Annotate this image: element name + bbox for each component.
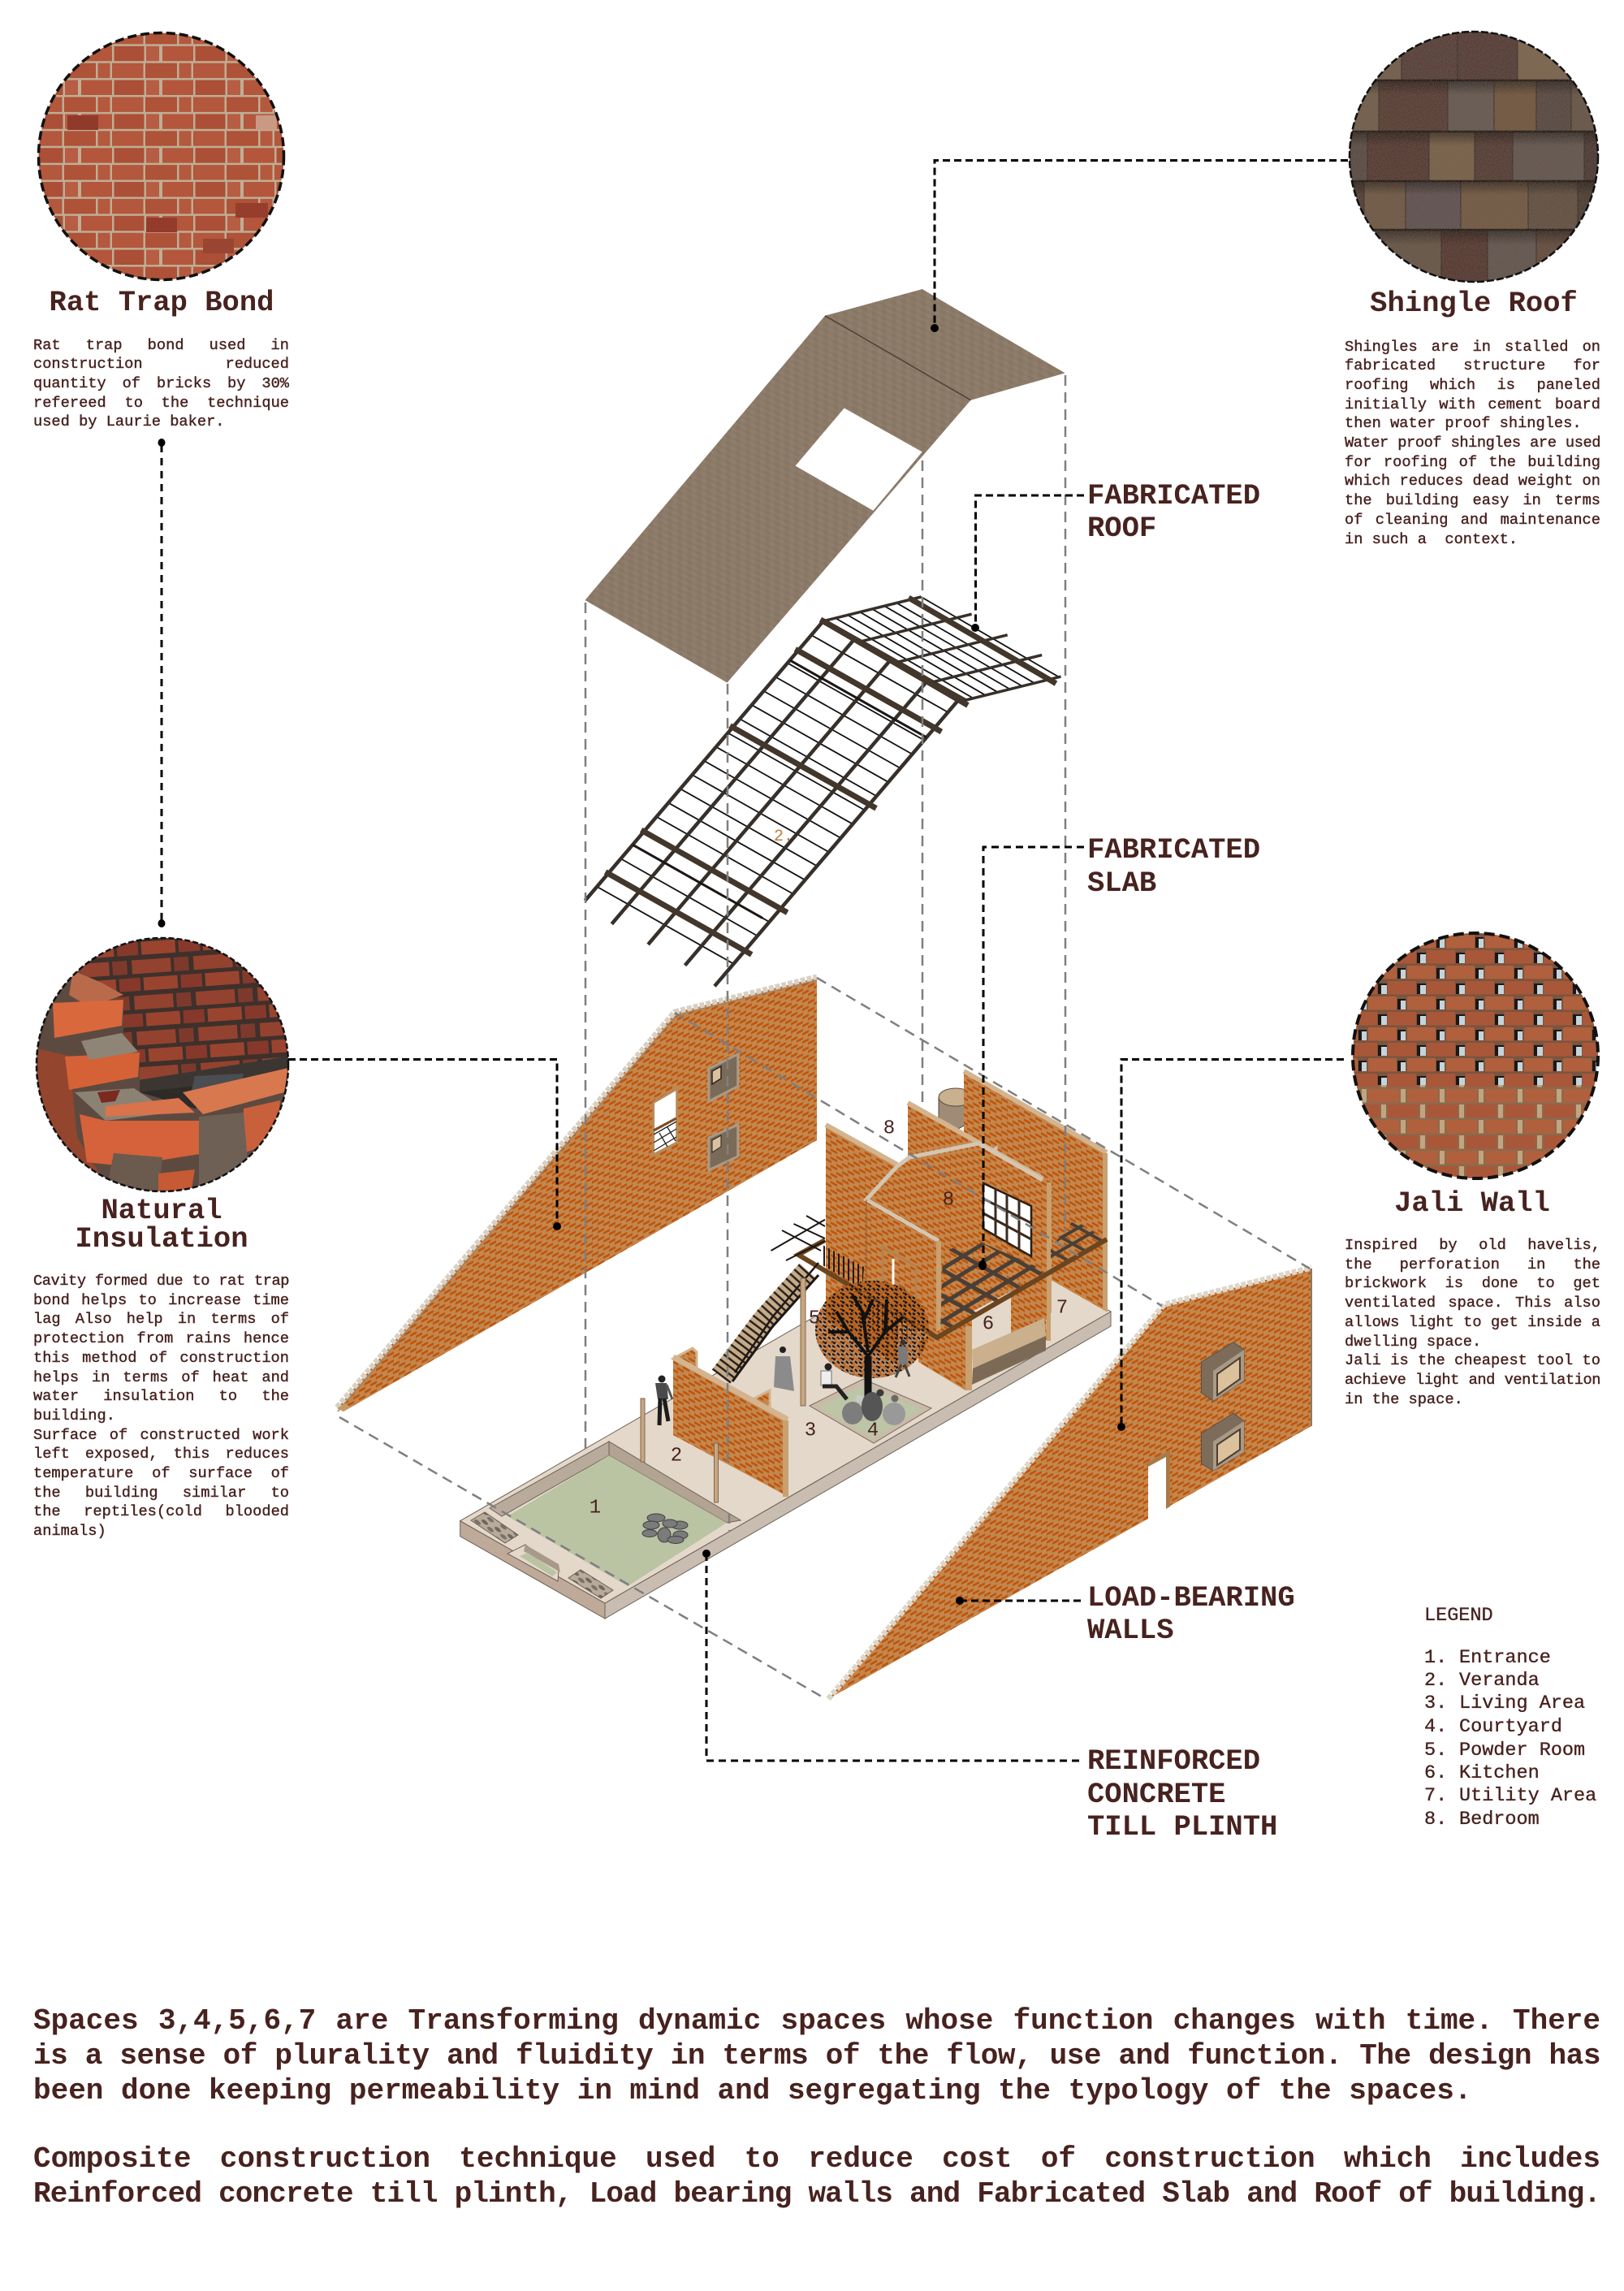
left upper wall xyxy=(826,1125,897,1364)
grey dashed projection lines xyxy=(339,375,1310,1699)
space numbers on plan: 8 xyxy=(883,1117,895,1140)
label: reinforced concrete till plinth xyxy=(1087,1744,1277,1844)
heading: Natural Insulation: Natural xyxy=(101,1194,222,1227)
leader: rat trap bond to natural insulation xyxy=(158,439,166,927)
text block: shingle roof xyxy=(1345,338,1600,548)
legend: Courtyard xyxy=(1459,1716,1562,1738)
planter left xyxy=(471,1512,518,1543)
label: fabricated roof: FABRICATED xyxy=(1087,479,1260,512)
text block: jali wall xyxy=(1345,1236,1600,1408)
legend: Living Area xyxy=(1459,1692,1585,1714)
text block: natural insulation xyxy=(33,1272,289,1540)
legend xyxy=(1424,1605,1596,1831)
space numbers on plan: 8 xyxy=(943,1189,954,1212)
text block: jali wall: allows light to get inside a xyxy=(1345,1313,1600,1331)
text block: natural insulation: the reptiles(cold blooded xyxy=(33,1502,289,1520)
space numbers on plan: 1 xyxy=(590,1498,601,1519)
person: woman in sari xyxy=(774,1347,794,1391)
courtyard with tree and people xyxy=(655,1281,931,1443)
text block: jali wall: brickwork is done to get xyxy=(1345,1274,1600,1292)
label: reinforced concrete till plinth: REINFORCED xyxy=(1087,1744,1260,1778)
text block: natural insulation: protection from rains hence xyxy=(33,1329,289,1347)
text block: shingle roof: Shingles are in stalled on xyxy=(1345,338,1600,356)
bedroom window xyxy=(983,1183,1031,1256)
legend: LEGEND xyxy=(1424,1605,1493,1627)
text block: shingle roof: Water proof shingles are used xyxy=(1345,434,1600,452)
gable wall xyxy=(866,1143,1052,1341)
entrance lawn xyxy=(490,1442,741,1592)
exploded layer: left load-bearing wall xyxy=(337,977,817,1411)
label: fabricated slab: FABRICATED xyxy=(1087,833,1260,867)
window box upper xyxy=(1202,1342,1244,1401)
wall recessed window lower xyxy=(709,1125,738,1170)
planter right xyxy=(568,1570,613,1598)
photo circle: shingle roof xyxy=(1340,29,1605,285)
exploded layer: fabricated roof frame xyxy=(575,592,1081,990)
label: fabricated slab: SLAB xyxy=(1087,867,1156,900)
text block: jali wall: Inspired by old havelis, xyxy=(1345,1236,1600,1254)
leader: load-bearing walls xyxy=(956,1597,1084,1605)
space numbers on plan: 4 xyxy=(867,1420,879,1442)
heading: Shingle Roof: Shingle Roof xyxy=(1370,287,1578,320)
text block: rat trap bond: used by Laurie baker. xyxy=(33,413,225,430)
text block: shingle roof: initially with cement board xyxy=(1345,396,1600,413)
label: load-bearing walls xyxy=(1087,1581,1295,1647)
text block: rat trap bond: construction reduced xyxy=(33,355,289,373)
text block: shingle roof: the building easy in terms xyxy=(1345,491,1600,509)
space numbers on plan: 6 xyxy=(983,1314,994,1335)
legend: Kitchen xyxy=(1459,1762,1540,1784)
photo circle: rat trap bond brickwork xyxy=(32,28,292,288)
legend: 1. xyxy=(1424,1647,1447,1669)
text block: shingle roof: of cleaning and maintenance xyxy=(1345,511,1600,529)
water tank xyxy=(939,1088,973,1129)
leader: fabricated slab xyxy=(978,847,1084,1270)
text block: jali wall: in the space. xyxy=(1345,1390,1463,1408)
text block: rat trap bond: refereed to the technique xyxy=(33,394,289,412)
text block: transforming spaces paragraph: is a sense of plurality and fluidity in terms of the flow, use and function. The design has xyxy=(33,2039,1600,2073)
legend: 6. xyxy=(1424,1762,1447,1784)
plinth slab xyxy=(460,1230,1111,1619)
tree xyxy=(815,1281,929,1398)
text block: natural insulation: animals) xyxy=(33,1522,106,1540)
legend: 5. xyxy=(1424,1740,1447,1761)
text block: shingle roof: roofing which is paneled xyxy=(1345,376,1600,394)
legend: Veranda xyxy=(1459,1670,1540,1692)
veranda brick wall xyxy=(673,1348,788,1497)
text block: natural insulation: lag Also help in terms of xyxy=(33,1310,289,1328)
legend: 2. xyxy=(1424,1670,1447,1692)
exploded layer: right load-bearing wall xyxy=(828,1268,1311,1699)
staircase xyxy=(721,1263,818,1381)
text block: natural insulation: Cavity formed due to rat trap xyxy=(33,1272,289,1290)
text block: natural insulation: bond helps to increase time xyxy=(33,1291,289,1309)
roof skylight opening xyxy=(796,408,922,511)
text block: transforming spaces paragraph: been done keeping permeability in mind and segregating the typology of the spaces. xyxy=(33,2074,1471,2107)
label: load-bearing walls: LOAD-BEARING xyxy=(1087,1581,1295,1615)
text block: rat trap bond: Rat trap bond used in xyxy=(33,336,289,354)
person: man walking xyxy=(655,1376,672,1425)
veranda and living posts xyxy=(641,1278,806,1502)
text block: rat trap bond xyxy=(33,336,289,430)
space numbers on plan: 7 xyxy=(1056,1298,1068,1319)
text block: natural insulation: left exposed, this reduces xyxy=(33,1445,289,1463)
legend: 8. xyxy=(1424,1809,1447,1831)
leader: fabricated roof xyxy=(971,495,1084,632)
heading: Natural Insulation xyxy=(75,1194,248,1256)
leader: reinforced concrete plinth xyxy=(702,1550,1084,1761)
text block: natural insulation: water insulation to the xyxy=(33,1387,289,1405)
text block: jali wall: Jali is the cheapest tool to xyxy=(1345,1351,1600,1369)
leader: jali wall xyxy=(1117,1059,1344,1431)
person: seated man xyxy=(821,1363,847,1399)
rear cross wall xyxy=(964,1071,1108,1312)
ground layer: plinth and entrance court xyxy=(460,1280,1112,1619)
space numbers on plan xyxy=(590,1117,1068,1519)
text block: rat trap bond: quantity of bricks by 30% xyxy=(33,374,289,392)
legend: 3. xyxy=(1424,1692,1447,1714)
text block: transforming spaces paragraph xyxy=(33,2004,1600,2107)
people: seated group xyxy=(842,1389,905,1425)
text block: composite construction paragraph: Composite construction technique used to reduce cost of construction which includes xyxy=(33,2142,1600,2176)
text block: shingle roof: for roofing of the building xyxy=(1345,453,1600,471)
stair railing xyxy=(823,1245,913,1344)
photo circle: natural insulation cavity wall xyxy=(32,934,292,1194)
text block: shingle roof: then water proof shingles. xyxy=(1345,414,1582,432)
text block: transforming spaces paragraph: Spaces 3,4,5,6,7 are Transforming dynamic spaces whose function changes with time. There xyxy=(33,2004,1600,2038)
wall recessed window upper xyxy=(709,1054,738,1101)
text block: natural insulation: building. xyxy=(33,1407,115,1424)
window box lower xyxy=(1202,1413,1244,1471)
space numbers on plan: 5 xyxy=(809,1308,820,1330)
text block: composite construction paragraph xyxy=(33,2142,1600,2211)
label: fabricated slab xyxy=(1087,833,1260,900)
text block: jali wall: ventilated space. This also xyxy=(1345,1294,1600,1312)
first floor slab lattice xyxy=(771,1215,1108,1340)
text block: jali wall: achieve light and ventilation xyxy=(1345,1371,1600,1389)
text block: jali wall: the perforation in the xyxy=(1345,1256,1600,1273)
wall opening with view through xyxy=(654,1089,677,1155)
legend: Utility Area xyxy=(1459,1785,1596,1807)
text block: natural insulation: this method of construction xyxy=(33,1349,289,1367)
label: load-bearing walls: WALLS xyxy=(1087,1614,1174,1647)
text block: shingle roof: fabricated structure for xyxy=(1345,357,1600,374)
label: reinforced concrete till plinth: CONCRETE xyxy=(1087,1778,1225,1811)
legend: Bedroom xyxy=(1459,1809,1540,1831)
text block: jali wall: dwelling space. xyxy=(1345,1333,1481,1351)
ground layer: inner brick walls and rooms xyxy=(641,1071,1123,1502)
text block: natural insulation: the building similar to xyxy=(33,1484,289,1502)
legend: 7. xyxy=(1424,1785,1447,1807)
text block: shingle roof: which reduces dead weight on xyxy=(1345,472,1600,490)
leader: shingle roof xyxy=(931,161,1348,332)
heading: Natural Insulation: Insulation xyxy=(75,1222,248,1256)
person: walking in courtyard edge xyxy=(896,1340,909,1377)
label: fabricated roof xyxy=(1087,479,1260,545)
heading: Rat Trap Bond: Rat Trap Bond xyxy=(50,286,274,319)
space numbers on plan: 2 xyxy=(671,1446,682,1467)
door opening frame xyxy=(1145,1450,1170,1509)
label: reinforced concrete till plinth: TILL PLINTH xyxy=(1087,1810,1277,1844)
cement bags xyxy=(642,1514,688,1543)
entrance step xyxy=(508,1545,559,1581)
photo circle: jali wall xyxy=(1348,930,1608,1182)
courtyard bed xyxy=(810,1379,931,1443)
text block: shingle roof: in such a context. xyxy=(1345,530,1518,548)
legend: Powder Room xyxy=(1459,1740,1585,1761)
space numbers on plan: 3 xyxy=(805,1420,816,1442)
text block: natural insulation: temperature of surface of xyxy=(33,1464,289,1482)
text block: natural insulation: Surface of constructed work xyxy=(33,1426,289,1444)
heading: Jali Wall: Jali Wall xyxy=(1394,1187,1550,1220)
exploded layer: shingle roof xyxy=(585,289,1065,683)
kitchen xyxy=(918,1267,1107,1390)
text block: natural insulation: helps in terms of heat and xyxy=(33,1368,289,1386)
frame number mark: 2. xyxy=(774,828,793,846)
label: fabricated roof: ROOF xyxy=(1087,512,1156,545)
leader: natural insulation xyxy=(288,1059,561,1230)
legend: Entrance xyxy=(1459,1647,1551,1669)
middle cross wall xyxy=(908,1103,1043,1340)
legend: 4. xyxy=(1424,1716,1447,1738)
text block: composite construction paragraph: Reinforced concrete till plinth, Load bearing walls and Fabricated Slab and Roof of building. xyxy=(33,2177,1600,2211)
